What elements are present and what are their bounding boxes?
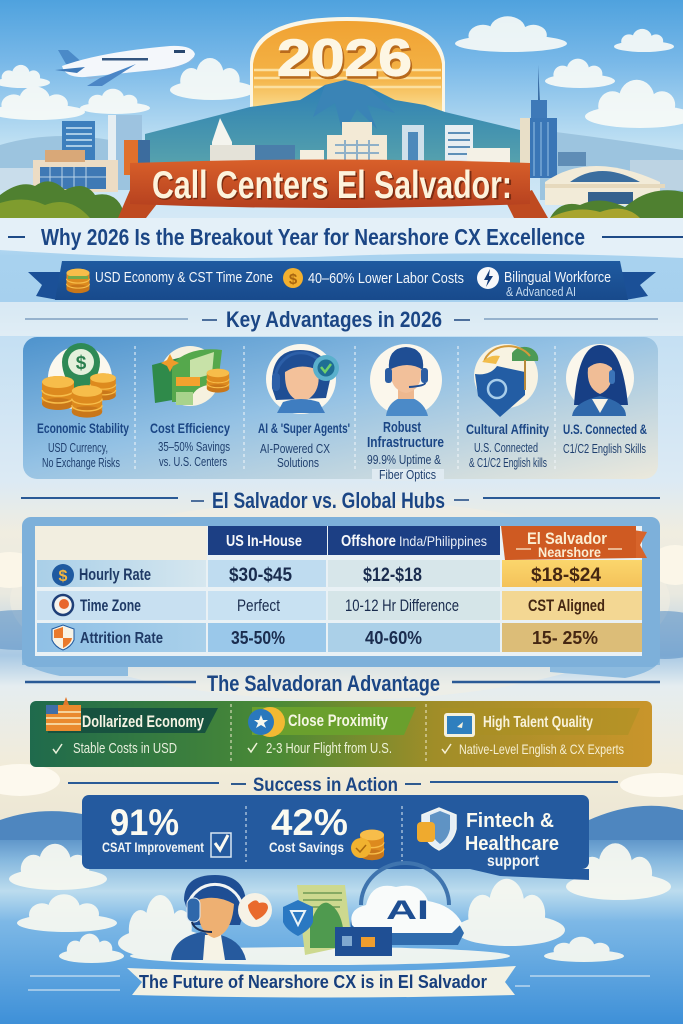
- item: high talent quality: High Talent Quality: [483, 714, 593, 731]
- card: cost efficiency: Cost Efficiency: [150, 420, 230, 436]
- row: time zone: Time Zone: [80, 597, 141, 615]
- row: time zone: [37, 591, 642, 620]
- stat: csat: 91%: [110, 802, 179, 843]
- comparison table: [22, 517, 660, 678]
- row: attrition rate: 40-60%: [365, 628, 422, 648]
- heading: key advantages: Key Advantages in 2026: [226, 307, 442, 332]
- item: high talent quality: [440, 708, 640, 757]
- trees: [0, 181, 683, 218]
- card: robust infrastructure: [367, 344, 444, 482]
- heading: global hubs: El Salvador vs. Global Hubs: [212, 488, 445, 513]
- row: hourly rate: $: [59, 568, 68, 585]
- card: AI and super agents: AI & 'Super Agents': [258, 420, 350, 436]
- row: time zone: Perfect: [237, 597, 280, 615]
- card: cost efficiency: vs. U.S. Centers: [159, 454, 227, 469]
- column headers: Inda/Philippines: [399, 533, 487, 549]
- speech heart: [238, 893, 272, 927]
- stadium: [545, 166, 665, 205]
- card: english skills: U.S. Connected &: [563, 421, 647, 437]
- 2026 sun badge: 2026: [277, 30, 412, 88]
- card: robust infrastructure: 99.9% Uptime &: [367, 452, 441, 467]
- card: economic stability: $: [76, 353, 87, 374]
- item: close proximity: 2-3 Hour Flight from U.S.: [266, 741, 392, 757]
- stat: fintech and healthcare: [417, 808, 559, 870]
- label backing: fiber optics: Fiber Optics: [379, 467, 436, 482]
- feature ribbon: USD Economy & CST Time Zone: [95, 270, 273, 286]
- column headers: US In-House: [226, 533, 302, 550]
- documents: [297, 885, 352, 955]
- card: economic stability: No Exchange Risks: [42, 455, 120, 470]
- 2026 sun badge: [250, 17, 445, 115]
- column headers: Offshore: [341, 533, 396, 550]
- item: close proximity: Close Proximity: [288, 711, 388, 730]
- item: dollarized economy: Stable Costs in USD: [73, 741, 177, 757]
- stat: csat: [102, 802, 231, 857]
- card: cultural affinity: [466, 344, 549, 470]
- card: AI and super agents: [258, 344, 350, 470]
- panel: salvadoran advantage: [30, 697, 652, 767]
- card: economic stability: USD Currency,: [48, 440, 108, 455]
- heading: salvadoran advantage: The Salvadoran Advantage: [207, 671, 440, 696]
- icon: dollar coin: [283, 268, 303, 288]
- row: hourly rate: $12-$18: [363, 565, 422, 586]
- subtitle band: Why 2026 Is the Breakout Year for Nearshore CX Excellence: [41, 224, 585, 250]
- title banner: [118, 160, 548, 218]
- el salvador header flag: [501, 526, 647, 560]
- shield: [283, 900, 313, 936]
- briefcase card: [335, 927, 392, 956]
- title banner: Call Centers El Salvador:: [153, 166, 514, 208]
- card: robust infrastructure: Infrastructure: [367, 435, 444, 451]
- stat: fintech and healthcare: Fintech &: [466, 809, 554, 832]
- icon: dollar coin: $: [289, 271, 298, 288]
- lower clouds: [9, 843, 671, 965]
- heading: success in action: Success in Action: [253, 774, 398, 796]
- card: cultural affinity: Cultural Affinity: [466, 421, 549, 437]
- item: dollarized economy: [46, 697, 218, 757]
- card: english skills: C1/C2 English Skills: [563, 441, 646, 456]
- 2026 sun badge: 2026: [278, 32, 414, 90]
- stat: cost savings: Cost Savings: [269, 839, 344, 855]
- closing ribbon: [28, 966, 650, 998]
- card: cultural affinity: & C1/C2 English kills: [469, 456, 547, 470]
- feature ribbon: Bilingual Workforce: [504, 270, 611, 286]
- closing ribbon: The Future of Nearshore CX is in El Salvador: [139, 972, 487, 992]
- heading: key advantages: [0, 302, 683, 336]
- card: robust infrastructure: Robust: [383, 420, 421, 436]
- row: hourly rate: Hourly Rate: [79, 566, 151, 584]
- row: time zone: 10-12 Hr Difference: [345, 597, 459, 615]
- stat: csat: CSAT Improvement: [102, 839, 204, 855]
- row: time zone: CST Aligned: [528, 597, 605, 615]
- feature ribbon: & Advanced AI: [506, 285, 576, 299]
- el salvador header flag: El Salvador: [527, 529, 607, 548]
- stat: fintech and healthcare: support: [487, 853, 539, 870]
- card: english skills: [563, 344, 647, 456]
- card: economic stability: Economic Stability: [37, 420, 129, 436]
- stat: fintech and healthcare: Healthcare: [465, 832, 559, 855]
- distant hills: [0, 130, 683, 200]
- card: cultural affinity: U.S. Connected: [474, 441, 538, 455]
- item: dollarized economy: Dollarized Economy: [82, 712, 204, 731]
- card: economic stability: [37, 343, 129, 470]
- AI cloud: AI: [386, 895, 429, 925]
- item: close proximity: [248, 707, 416, 757]
- card: AI and super agents: Solutions: [277, 455, 319, 470]
- icon: bilingual badge: [477, 267, 499, 289]
- agent: [171, 875, 246, 960]
- row: attrition rate: 15- 25%: [532, 627, 598, 648]
- row: attrition rate: Attrition Rate: [80, 630, 163, 647]
- illustration: agent with AI cloud: [171, 863, 464, 960]
- subtitle band: [0, 218, 683, 258]
- panel: key advantages: [23, 337, 658, 482]
- panel: success stats: [82, 795, 589, 880]
- row: attrition rate: 35-50%: [231, 628, 285, 648]
- AI cloud: [351, 863, 464, 945]
- icon: coin stack: [66, 269, 90, 293]
- row: hourly rate: $30-$45: [229, 565, 292, 586]
- stat: cost savings: 42%: [271, 802, 348, 843]
- title banner: Call Centers El Salvador:: [152, 164, 512, 207]
- item: high talent quality: Native-Level English & CX Experts: [459, 741, 624, 757]
- card: cost efficiency: 35–50% Savings: [158, 439, 230, 454]
- stat: cost savings: [269, 802, 384, 860]
- row: attrition rate: [37, 623, 642, 652]
- column headers: [208, 526, 500, 555]
- feature ribbon: [28, 261, 656, 300]
- row: hourly rate: $18-$24: [531, 565, 601, 586]
- volcano: [145, 80, 520, 180]
- feature ribbon: 40–60% Lower Labor Costs: [308, 270, 464, 287]
- airplane icon: [55, 46, 195, 86]
- el salvador header flag: Nearshore: [538, 545, 601, 560]
- sky clouds: [0, 16, 683, 128]
- card: cost efficiency: [150, 346, 230, 469]
- city skyline: [0, 65, 683, 192]
- row: hourly rate: [37, 560, 642, 587]
- card: AI and super agents: AI-Powered CX: [260, 441, 330, 456]
